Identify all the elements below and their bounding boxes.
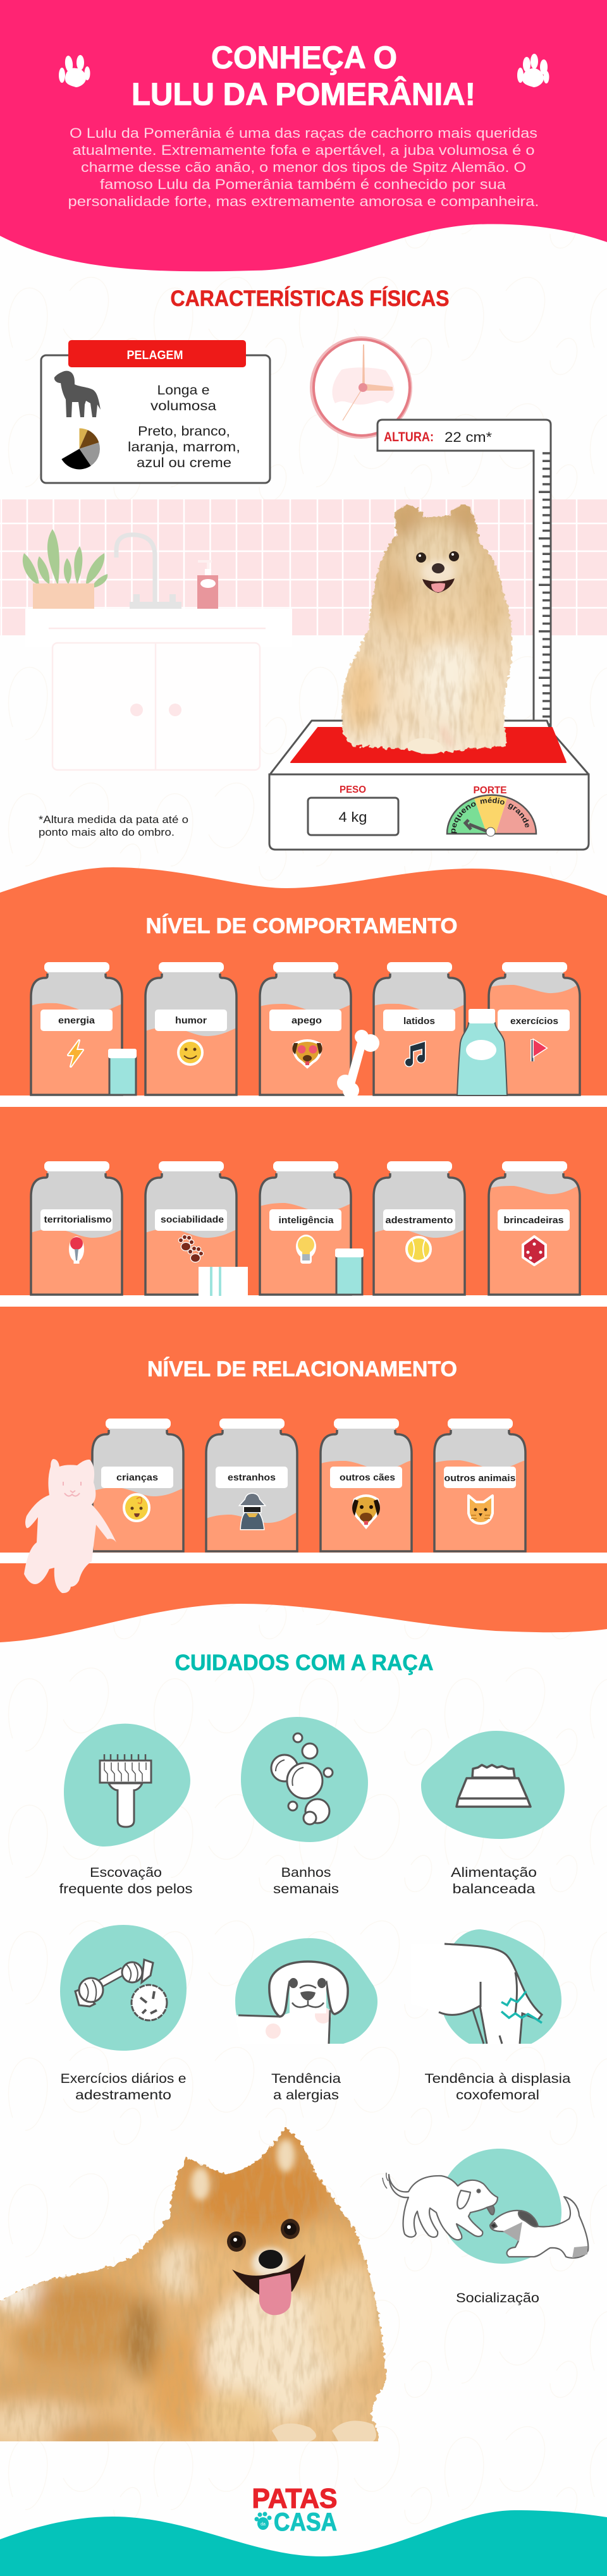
soap bottle xyxy=(197,561,218,609)
jar: sociabilidade: sociabilidade xyxy=(161,1214,224,1225)
icon: dog xyxy=(352,1496,380,1527)
jar: energia xyxy=(31,962,122,1095)
jar: territorialismo: territorialismo xyxy=(44,1214,111,1225)
caption: adestramento xyxy=(75,2088,171,2103)
faucet xyxy=(116,535,181,609)
icon: food bowl xyxy=(457,1765,530,1807)
icon: colour pie xyxy=(61,429,100,469)
heading: cuidados com a raça: CUIDADOS COM A RAÇA xyxy=(175,1651,434,1675)
panel: pelagem: PELAGEM xyxy=(126,349,183,362)
icon: paw right xyxy=(517,54,549,87)
caption: Exercícios diários e xyxy=(61,2072,186,2086)
jar: inteligência xyxy=(260,1161,351,1295)
icon: spy xyxy=(240,1494,264,1529)
header band xyxy=(0,0,607,271)
icon: dog silhouette xyxy=(54,371,101,417)
caption: coxofemoral xyxy=(456,2088,539,2103)
height ruler xyxy=(377,420,551,742)
jar: brincadeiras: brincadeiras xyxy=(503,1215,564,1226)
bone xyxy=(337,1030,379,1099)
gauge: porte: grande xyxy=(508,803,529,828)
jar: apego xyxy=(260,962,351,1095)
jar: apego: apego xyxy=(291,1015,322,1026)
clock xyxy=(312,338,410,437)
jar: brincadeiras xyxy=(489,1161,580,1295)
face xyxy=(416,551,459,593)
jar: crianças xyxy=(92,1419,183,1551)
icon: tennis ball xyxy=(407,1237,431,1261)
intro text xyxy=(68,125,539,209)
jar: inteligência: inteligência xyxy=(278,1215,334,1226)
caption: semanais xyxy=(273,1882,339,1896)
weight display: 4 kg xyxy=(339,809,367,825)
icon: baby xyxy=(124,1494,149,1521)
jar: exercícios xyxy=(489,962,580,1095)
heading: características físicas: CARACTERÍSTICAS FÍSICAS xyxy=(171,286,449,311)
gauge: porte: médio xyxy=(481,797,505,805)
panel: orange section xyxy=(0,867,607,1642)
caption xyxy=(59,1865,192,1896)
icon: brush xyxy=(100,1754,151,1827)
shelf 3 xyxy=(0,1553,607,1563)
scale xyxy=(268,719,590,851)
height ruler: 22 cm* xyxy=(445,429,492,445)
care: alergias xyxy=(235,1938,377,2103)
icon: dogs playing xyxy=(383,2173,588,2258)
shelf 2 xyxy=(0,1295,607,1307)
care: banhos xyxy=(241,1717,368,1896)
icon: dice xyxy=(523,1236,546,1265)
jar: adestramento: adestramento xyxy=(386,1215,453,1226)
gauge: porte xyxy=(446,794,537,837)
striped box xyxy=(199,1267,248,1296)
icon: smile xyxy=(178,1041,202,1065)
photo: pomeranian on scale xyxy=(341,504,512,754)
icon: dog in love xyxy=(292,1041,322,1067)
caption: Tendência xyxy=(271,2072,341,2086)
care: alimentação xyxy=(421,1731,565,1896)
footer wave xyxy=(0,2510,607,2576)
text: altura: ALTURA: xyxy=(384,430,434,444)
caption xyxy=(271,2072,341,2103)
icon: music xyxy=(405,1042,425,1066)
footnote: ponto mais alto do ombro. xyxy=(39,826,175,838)
caption: Tendência à displasia xyxy=(425,2072,571,2086)
intro text: famoso Lulu da Pomerânia também é conhecido por sua xyxy=(100,176,506,192)
text: coat length: Longa e xyxy=(157,383,210,398)
text: coat colours: Preto, branco, xyxy=(138,424,230,439)
jar: exercícios: exercícios xyxy=(510,1016,558,1027)
jar: humor: humor xyxy=(175,1015,207,1026)
counter and cabinet xyxy=(25,609,292,770)
intro text: charme desse cão anão, o menor dos tipos de Spitz Alemão. O xyxy=(81,159,526,175)
shelf 1 xyxy=(0,1096,607,1107)
text: coat length: volumosa xyxy=(150,399,216,413)
caption: Banhos xyxy=(281,1865,331,1880)
text: peso: PESO xyxy=(340,784,366,795)
wall tiles xyxy=(0,499,607,635)
caption xyxy=(61,2072,186,2103)
intro text: atualmente. Extremamente fofa e apertável, a juba volumosa é o xyxy=(72,142,535,158)
jar: energia: energia xyxy=(58,1015,95,1026)
jar: outros animais: outros animais xyxy=(444,1473,516,1484)
icon: dog face xyxy=(235,1962,348,2044)
caption: Socialização xyxy=(456,2291,539,2305)
caption xyxy=(451,1865,537,1896)
jar: latidos: latidos xyxy=(403,1016,435,1027)
icon: logo paw: da xyxy=(261,2522,266,2527)
icon: dog hip xyxy=(411,1944,542,2044)
caption xyxy=(425,2072,571,2103)
icon: bubbles xyxy=(271,1733,333,1824)
logo xyxy=(252,2483,338,2536)
jar: sociabilidade xyxy=(145,1161,236,1295)
icon: pushpin xyxy=(69,1236,84,1264)
care: exercícios xyxy=(60,1925,187,2103)
care: displasia xyxy=(411,1929,571,2103)
jar: latidos xyxy=(374,962,465,1095)
jar: humor xyxy=(145,962,236,1095)
caption: Escovação xyxy=(90,1865,162,1880)
heading: nível de relacionamento: NÍVEL DE RELACIONAMENTO xyxy=(147,1357,457,1381)
glass 2 xyxy=(335,1248,364,1295)
caption xyxy=(273,1865,339,1896)
face xyxy=(227,2219,305,2315)
text: coat colours: azul ou creme xyxy=(137,456,231,470)
icon: paw left xyxy=(59,55,90,87)
icon: bulb xyxy=(296,1235,316,1264)
care: escovação xyxy=(59,1724,192,1896)
jar: territorialismo xyxy=(31,1161,122,1295)
care: socialização xyxy=(383,2149,588,2305)
title: LULU DA POMERÂNIA! xyxy=(132,76,475,112)
heading: nível de comportamento: NÍVEL DE COMPORTAMENTO xyxy=(145,914,458,938)
jar: crianças: crianças xyxy=(116,1472,158,1483)
jar: outros cães xyxy=(321,1419,412,1551)
glass 1 xyxy=(108,1049,137,1095)
caption: Alimentação xyxy=(451,1865,537,1880)
jar: estranhos xyxy=(206,1419,297,1551)
weight display xyxy=(308,798,398,835)
icon: cat xyxy=(469,1496,493,1523)
title xyxy=(132,40,475,112)
bottle xyxy=(457,1009,507,1096)
title: CONHEÇA O xyxy=(211,40,397,75)
teddy bear xyxy=(24,1459,116,1593)
text: coat length xyxy=(150,383,216,413)
logo: PATAS xyxy=(252,2483,338,2514)
footnote: *Altura medida da pata até o xyxy=(39,814,188,826)
caption: frequente dos pelos xyxy=(59,1882,192,1896)
logo: CASA xyxy=(274,2508,337,2536)
jar: estranhos: estranhos xyxy=(228,1472,276,1483)
jar: outros animais xyxy=(434,1419,525,1551)
photo: pomeranian lying xyxy=(0,2127,387,2453)
text: coat colours xyxy=(128,424,240,470)
intro text: O Lulu da Pomerânia é uma das raças de cachorro mais queridas xyxy=(70,125,537,141)
icon: lightning xyxy=(68,1041,83,1066)
icon: paws xyxy=(179,1235,203,1262)
panel: pelagem xyxy=(41,340,270,483)
icon: rope and ball xyxy=(75,1960,167,2020)
intro text: personalidade forte, mas extremamente amorosa e companheira. xyxy=(68,193,539,209)
icon: flag xyxy=(532,1039,546,1061)
plant xyxy=(23,529,107,609)
text: coat colours: laranja, marrom, xyxy=(128,440,240,455)
text: porte: PORTE xyxy=(473,785,507,796)
caption: balanceada xyxy=(453,1882,536,1896)
jar: adestramento xyxy=(374,1161,465,1295)
caption: a alergias xyxy=(273,2088,339,2103)
jar: outros cães: outros cães xyxy=(340,1472,395,1483)
footnote xyxy=(39,814,188,838)
gauge: porte: pequeno xyxy=(451,802,475,833)
